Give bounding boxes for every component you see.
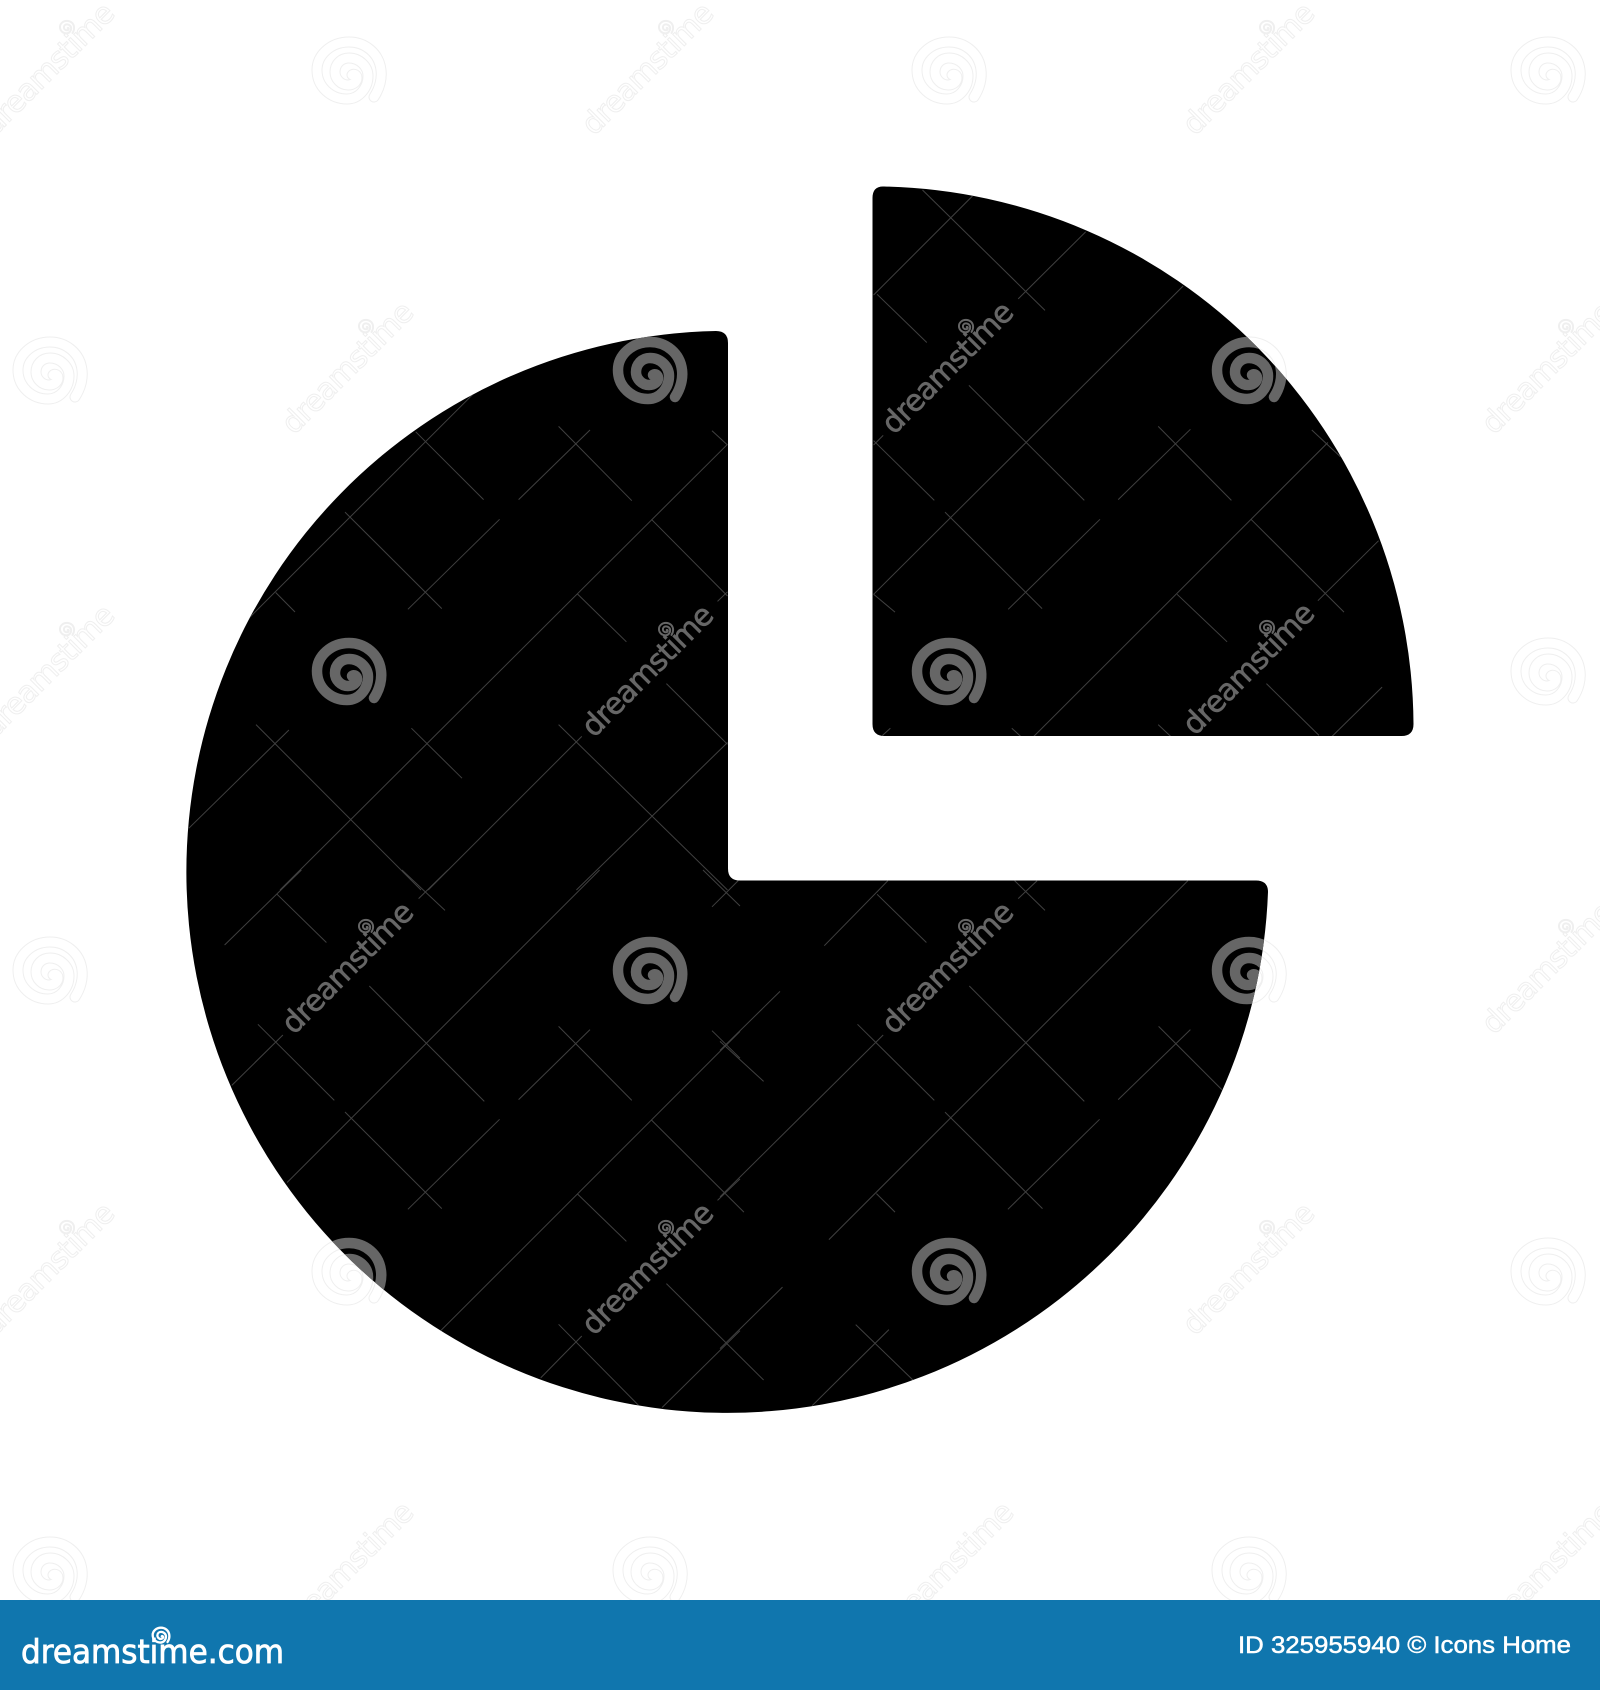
faint watermark on white: dreamstime	[875, 1495, 1021, 1641]
large pie sector	[186, 331, 1268, 1413]
watermark wordmarks: dreamstime	[275, 895, 421, 1041]
small quarter slice	[872, 186, 1414, 736]
watermark wordmarks	[275, 295, 1322, 1342]
watermark wordmarks: dreamstime	[575, 1196, 721, 1342]
footer bar	[0, 1600, 1600, 1690]
watermark wordmarks: dreamstime	[875, 295, 1021, 441]
icon: pie chart	[186, 186, 1413, 1413]
watermark lines	[189, 190, 1382, 1408]
faint watermark on white: dreamstime	[275, 295, 421, 441]
faint watermark on white: dreamstime	[1176, 598, 1322, 744]
watermark wordmarks: dreamstime	[1176, 596, 1322, 742]
watermark wordmarks: dreamstime	[575, 598, 721, 744]
faint watermark on white: dreamstime	[275, 1495, 421, 1641]
faint watermark on white: dreamstime	[1176, 0, 1322, 142]
footer image ID and credit: ID 325955940 © Icons Home	[1238, 1632, 1571, 1659]
watermark wordmarks: dreamstime	[875, 895, 1021, 1041]
faint watermark on white: dreamstime	[575, 0, 721, 142]
icon: logo spiral	[153, 1628, 169, 1643]
faint watermark on white: dreamstime	[875, 295, 1021, 441]
watermark over pie chart	[189, 190, 1382, 1408]
watermark spirals	[317, 342, 1281, 1300]
footer logo: dreamstime.com	[21, 1632, 284, 1671]
faint watermark on white: dreamstime	[1176, 1196, 1322, 1342]
